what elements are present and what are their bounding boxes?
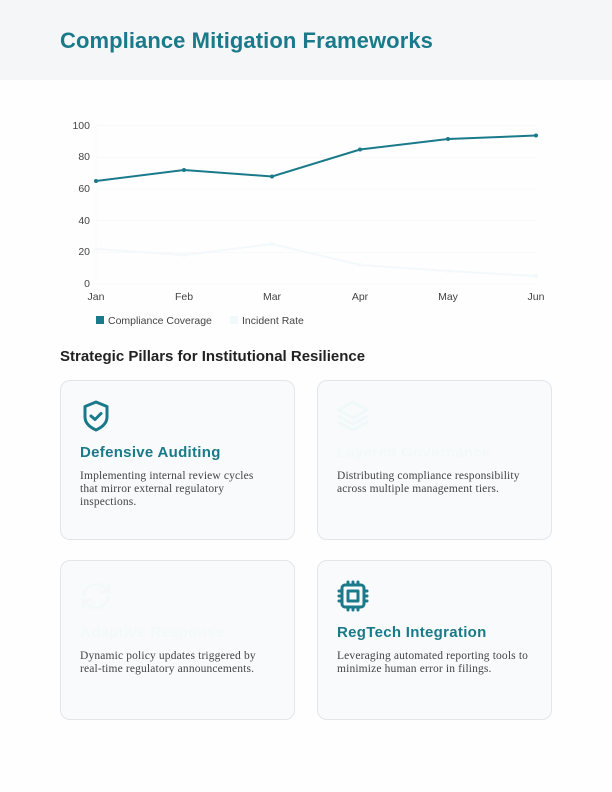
panel: layered governance <box>317 380 552 540</box>
legend <box>96 315 304 327</box>
card text <box>80 470 254 508</box>
card text: Implementing internal review cycles <box>80 470 254 482</box>
panel: regtech integration <box>317 560 552 720</box>
card text: Distributing compliance responsibility <box>337 470 520 482</box>
y axis labels: 80 <box>78 151 90 163</box>
header band <box>0 0 612 80</box>
card heading: RegTech Integration <box>337 624 487 641</box>
icon: chip <box>338 580 368 612</box>
card text <box>337 650 528 675</box>
x axis labels: Jun <box>528 291 545 303</box>
y axis labels: 40 <box>78 215 90 227</box>
x axis labels: Apr <box>352 291 369 303</box>
icon: refresh <box>80 580 112 612</box>
y axis labels: 100 <box>72 120 90 132</box>
panel: defensive auditing <box>60 380 295 540</box>
x axis labels: Mar <box>263 291 282 303</box>
icon: shield <box>84 400 108 432</box>
card heading: Defensive Auditing <box>80 444 221 461</box>
card heading: Layered Governance <box>337 444 491 461</box>
x axis labels: May <box>438 291 459 303</box>
card text <box>80 650 256 675</box>
x axis labels <box>88 291 545 303</box>
icon: layers <box>338 401 368 432</box>
card text: inspections. <box>80 496 136 508</box>
legend: Incident Rate <box>242 315 304 327</box>
line chart <box>72 120 545 327</box>
section heading: Strategic Pillars for Institutional Resilience <box>60 348 365 365</box>
card text: Dynamic policy updates triggered by <box>80 650 256 662</box>
x axis labels: Feb <box>175 291 193 303</box>
y axis labels: 0 <box>84 278 90 290</box>
card text: that mirror external regulatory <box>80 483 224 495</box>
card text: real-time regulatory announcements. <box>80 663 254 675</box>
card text: Leveraging automated reporting tools to <box>337 650 528 662</box>
panel: adaptive response <box>60 560 295 720</box>
card text: minimize human error in filings. <box>337 663 492 675</box>
card heading: Adaptive Response <box>80 624 224 641</box>
y axis labels <box>72 120 90 290</box>
y axis labels: 60 <box>78 183 90 195</box>
title: Compliance Mitigation Frameworks <box>60 28 433 53</box>
legend: Compliance Coverage <box>108 315 212 327</box>
card text <box>337 470 520 495</box>
y axis labels: 20 <box>78 246 90 258</box>
card text: across multiple management tiers. <box>337 483 499 495</box>
series: incident rate <box>94 242 538 278</box>
series: compliance coverage <box>94 134 538 183</box>
x axis labels: Jan <box>88 291 105 303</box>
